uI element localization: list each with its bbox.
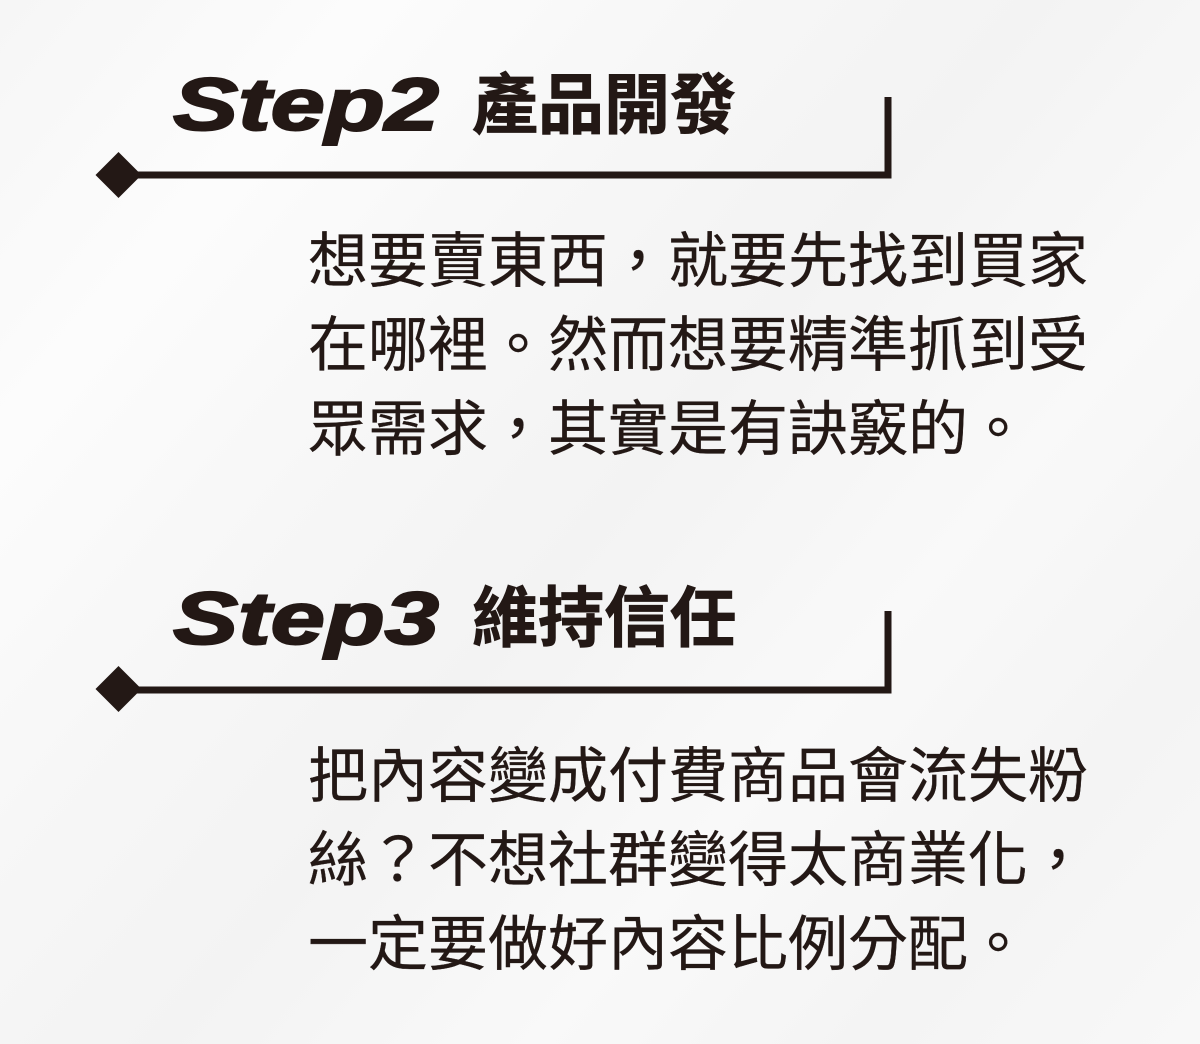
heading: Step3: Step3: [173, 577, 439, 660]
panel: step 3: [96, 565, 1088, 978]
text block: step 3 body: 一定要做好內容比例分配。: [308, 911, 1028, 978]
text block: step 3 body: [308, 743, 1088, 978]
panel: step 2: [96, 52, 1088, 463]
text block: step 3 body: 把內容變成付費商品會流失粉: [308, 743, 1088, 810]
heading: Step2: Step2: [173, 63, 439, 146]
bracket line with diamond: [96, 611, 892, 712]
bracket line with diamond: [96, 97, 892, 198]
heading: maintain trust: 維持信任: [472, 565, 736, 661]
heading: product development: 產品開發: [472, 52, 736, 148]
text block: step 2 body: [308, 228, 1088, 463]
text block: step 2 body: 在哪裡。然而想要精準抓到受: [308, 312, 1088, 379]
text block: step 2 body: 想要賣東西，就要先找到買家: [308, 228, 1088, 295]
text block: step 3 body: 絲？不想社群變得太商業化，: [308, 827, 1088, 894]
text block: step 2 body: 眾需求，其實是有訣竅的。: [308, 396, 1028, 463]
